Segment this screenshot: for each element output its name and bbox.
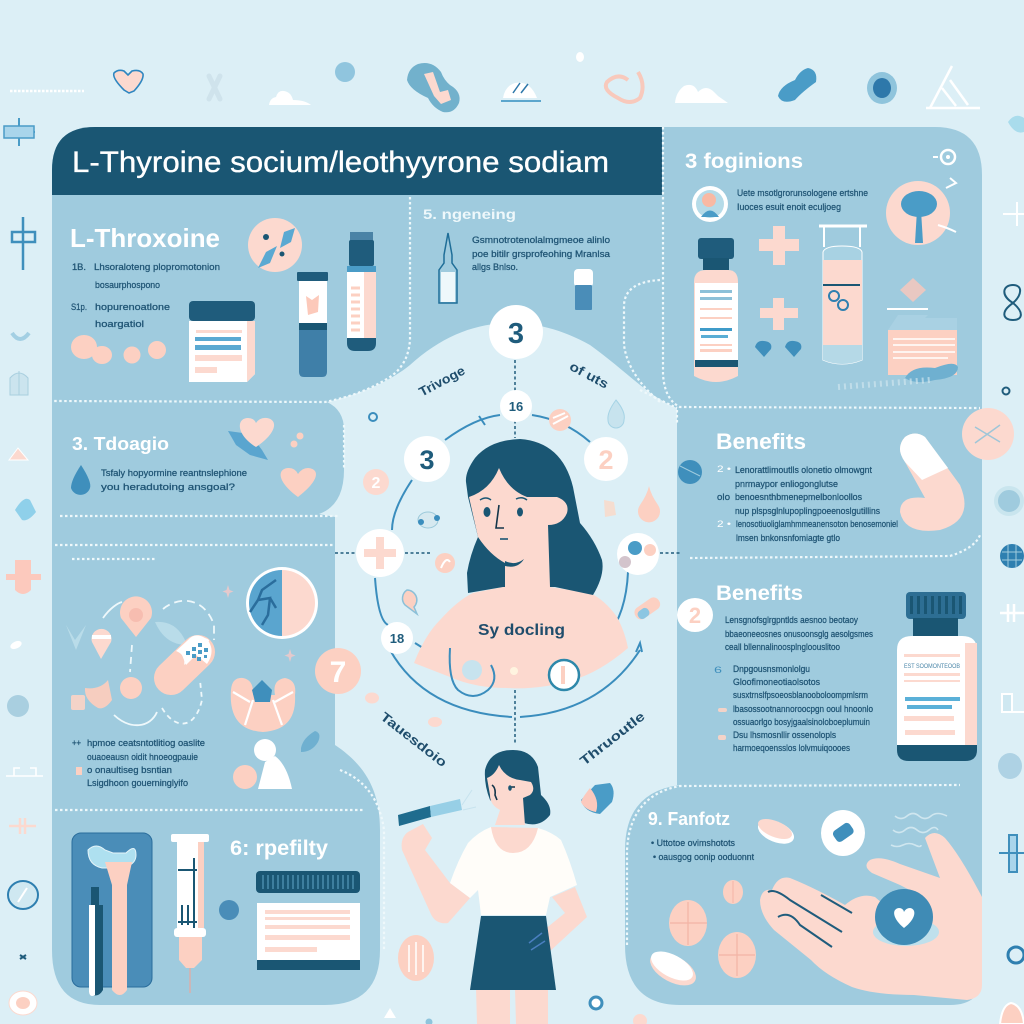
tall bottle: [347, 232, 376, 351]
text block: Lensgnofsglrgpntlds aesnoo beotaoy: [725, 615, 858, 625]
badge dots right: [617, 533, 659, 575]
badge 3 top: 3: [508, 318, 524, 350]
heading: 5. ngeneing: [423, 206, 516, 222]
dashed panel dividers: [52, 127, 980, 950]
decor: top icon row: [10, 52, 980, 112]
text block: • Uttotoe ovimshotots: [651, 838, 735, 848]
short bottle: [297, 272, 328, 377]
badge 3 top: [489, 305, 543, 359]
text block: allgs Bnlso.: [472, 262, 518, 272]
body label: Sy docling: [478, 622, 565, 639]
icon: radial circle: [867, 72, 897, 104]
plus icons: [759, 226, 799, 330]
person icon: [233, 739, 292, 789]
floating icons: 2: [372, 475, 381, 492]
badge 3 left: [404, 436, 450, 482]
white circle with blue pill: [821, 810, 865, 856]
ring arc: [375, 415, 642, 717]
panel: benefits 1: [678, 429, 964, 543]
hatch marks: [838, 380, 930, 387]
hair: [485, 750, 550, 824]
long hair: [466, 439, 603, 595]
text block: 1B.: [72, 262, 86, 272]
pen: [89, 887, 103, 996]
badge 3 left: 3: [419, 445, 435, 475]
icon: vial: [574, 269, 593, 310]
heading: 3. Tdoagio: [72, 434, 169, 454]
text block: 6: [714, 665, 722, 675]
hand: [760, 833, 982, 1000]
shirt: [450, 827, 577, 915]
folder icon: [887, 309, 957, 375]
dotted line: [10, 90, 84, 92]
text block: [714, 615, 873, 753]
curved labels: Tauesdoio: [378, 709, 450, 770]
text block: Gloofimoneotiaolsotos: [733, 677, 820, 687]
small dots: [290, 432, 304, 448]
text block: lenosotiuoliglamhmmeanensoton benosemoniel: [736, 519, 898, 529]
text block: hpmoe ceatsntotlitiog oaslite: [87, 738, 205, 748]
text block: • oausgog oonip ooduonnt: [653, 852, 754, 862]
circle 7: 7: [330, 656, 346, 689]
text block: hopurenoatlone: [95, 302, 170, 312]
curved labels: Trivoge: [416, 363, 467, 399]
blue bean: [905, 364, 958, 382]
avatar icon: [692, 186, 728, 222]
badge 16: 16: [509, 399, 523, 414]
tablet bottom: [645, 945, 701, 992]
icon: ampoule: [439, 233, 457, 303]
text block: ouaoeausn oidit hnoeogpauie: [87, 752, 198, 762]
text block: Iuoces esuit enoit eculjoeg: [737, 202, 841, 212]
icon: x: [209, 76, 220, 99]
heading: 3 foginions: [685, 150, 803, 173]
panel: foginions: [685, 150, 958, 387]
bottle label text: EST SOOMONTEOOB: [904, 663, 960, 670]
title banner: [52, 127, 662, 195]
text block: you heradutoing ansgoal?: [101, 482, 235, 492]
icon: small ring: [933, 150, 955, 164]
bottle: [694, 238, 738, 382]
icon: blue map and heart: [228, 418, 274, 460]
sparkles: [222, 585, 296, 662]
right arm: [530, 887, 587, 956]
icon: drop: [71, 465, 90, 495]
thyroid gland: [231, 678, 295, 732]
curved labels: [378, 359, 648, 770]
text block: benoesnthbmenepmelbonloollos: [735, 492, 862, 502]
title: L-Thyroine socium/leothyyrone sodiam: [72, 146, 609, 179]
text block: Dnpgousnsmonlolgu: [733, 664, 810, 674]
facial features: [480, 498, 527, 567]
small block: [71, 695, 85, 710]
capsule: [171, 635, 212, 678]
text block: bbaeoneeosnes onusoonsglg aesolgsmes: [725, 629, 873, 639]
pills: [71, 335, 166, 364]
text block: o onaultiseg bsntian: [87, 765, 172, 775]
neckline: [491, 827, 538, 853]
text block: [717, 464, 898, 543]
text block: pnrmaypor enliogonglutse: [735, 479, 838, 489]
text block: Tsfaly hopyormine reantnslephione: [101, 468, 247, 478]
panel: prefill: [72, 833, 360, 996]
circle 7: [315, 648, 361, 694]
icon: ball: [335, 62, 355, 82]
pin markers: [92, 596, 152, 659]
number 2 badge: [677, 598, 713, 632]
text block: hoargatiol: [95, 319, 144, 329]
text block: [101, 468, 247, 492]
dot: [576, 52, 584, 62]
squiggles: [891, 814, 947, 846]
icon: tent: [926, 66, 980, 108]
icon: blue blob: [407, 63, 460, 112]
text block: poe bitilr grsprofeohing Mranlsa: [472, 249, 610, 259]
curved labels: of uts: [567, 359, 611, 392]
panel: Tdoagio: [71, 418, 316, 497]
text block: olo: [717, 492, 730, 502]
blue disc: [219, 900, 239, 920]
badge plus: [356, 529, 404, 577]
floating icons: [363, 400, 662, 727]
peach dot: [120, 677, 142, 699]
wings: [88, 846, 136, 868]
icon: peach circle with pill: [248, 218, 302, 272]
peach stem: [105, 862, 132, 995]
icon: tree circle: [886, 178, 956, 245]
text block: susxtrnslfpsoeosblanooboloompmlsrm: [733, 690, 868, 700]
injector: [398, 790, 476, 826]
text block: bosaurphospono: [95, 280, 160, 290]
icon: cloud left: [269, 91, 311, 105]
heading: L-Throxoine: [70, 223, 220, 253]
blue tray: [72, 833, 152, 987]
text block: [651, 838, 754, 862]
text block: lbasossootnannoroocpgn ooul hnoonlo: [733, 704, 873, 714]
badge 18: 18: [390, 631, 404, 646]
test cylinder: [819, 226, 867, 364]
bottle: [897, 592, 977, 761]
text block: Uete msotlgrorunsologene ertshne: [737, 188, 868, 198]
badge 2 right: [584, 437, 628, 481]
text block: [737, 188, 868, 212]
skirt: [470, 916, 556, 990]
text block: ++: [72, 738, 81, 748]
bean icon: [301, 731, 319, 752]
dashed axes: [335, 360, 680, 745]
badge 2 right: 2: [598, 445, 614, 475]
icon: heart: [281, 468, 316, 497]
peach circle with icon: [962, 408, 1014, 460]
eye: [508, 785, 512, 791]
panel: Fanfotz: [645, 809, 982, 1000]
text block: [472, 235, 610, 272]
text block: Dsu lhsmosnllir ossenolopls: [733, 730, 836, 740]
icon: diamond: [900, 278, 926, 302]
text block: [72, 738, 205, 788]
icon: cloud right: [675, 85, 728, 103]
text block: ossuaorlgo bosyjgaalsinoloboeplumuin: [733, 717, 870, 727]
text block: Lenorattlimoutlls olonetio olmowgnt: [735, 465, 872, 475]
text block: ceall bllennalinoosplngloouslitoo: [725, 642, 840, 652]
dashed loops: [103, 601, 214, 725]
text block: 2 •: [717, 464, 731, 474]
heading: Benefits: [716, 429, 806, 454]
icon: blue blob 2: [778, 68, 816, 102]
face: [469, 468, 568, 596]
legs: [476, 988, 548, 1024]
leaf shapes: [66, 622, 187, 650]
panel: benefits 2: [677, 408, 1014, 761]
text block: S1p.: [71, 302, 87, 312]
panel: thyroid diagram: [66, 567, 361, 789]
thyroid outline marker: [450, 648, 579, 696]
small blue hearts: [755, 341, 801, 357]
decor: left margin icons: [4, 118, 43, 1015]
tablet top: [755, 815, 797, 848]
palm lines: [768, 891, 852, 947]
round pills: [669, 880, 756, 978]
syringe: [171, 834, 209, 993]
text block: lmsen bnkonsnfomiagte gtlo: [736, 533, 840, 543]
text block: [71, 262, 220, 329]
icon: heart: [114, 70, 143, 93]
text block: Gsmnotrotenolalmgmeoe alinlo: [472, 235, 610, 245]
box: [189, 301, 255, 382]
heading: 6: rpefilty: [230, 837, 328, 860]
blue disc: [678, 460, 702, 484]
panel: engineering: [423, 206, 610, 310]
text block: nup plspsglnlupoplingpoeenoslgutillins: [735, 506, 880, 516]
heading: Benefits: [716, 582, 803, 605]
features: [492, 785, 515, 800]
decor: right margin icons: [996, 116, 1024, 1024]
badge 16: [500, 390, 532, 422]
panel: main blue field: [52, 127, 982, 1005]
text block: Lhsoraloteng plopromotonion: [94, 262, 220, 272]
face: [487, 765, 533, 825]
icon: swirl: [606, 72, 643, 102]
coin: [873, 918, 939, 946]
badge 18: [381, 622, 413, 654]
text block: 2 •: [717, 519, 731, 529]
shoulders: [414, 587, 628, 688]
thyroid cross-section circle: [246, 567, 318, 639]
decor: bottom icons: [384, 783, 647, 1024]
text block: Lsigdhoon gouerninglyifo: [87, 778, 188, 788]
number 2 badge: 2: [689, 603, 701, 628]
peach blob: [85, 680, 112, 708]
hand hint: [529, 933, 545, 950]
raised arm: [402, 824, 470, 923]
central woman diagram: [335, 305, 680, 770]
curved labels: Thruoutle: [577, 709, 648, 768]
panel: L-Thyroxine: [70, 218, 376, 382]
box: [256, 871, 360, 970]
large capsule thumb: [900, 434, 964, 531]
icon: dome: [501, 83, 541, 101]
heading: 9. Fanfotz: [648, 809, 730, 829]
text block: harmoeqoensslos lolvmuiqoooes: [733, 743, 850, 753]
standing girl with injector: [398, 750, 587, 1024]
